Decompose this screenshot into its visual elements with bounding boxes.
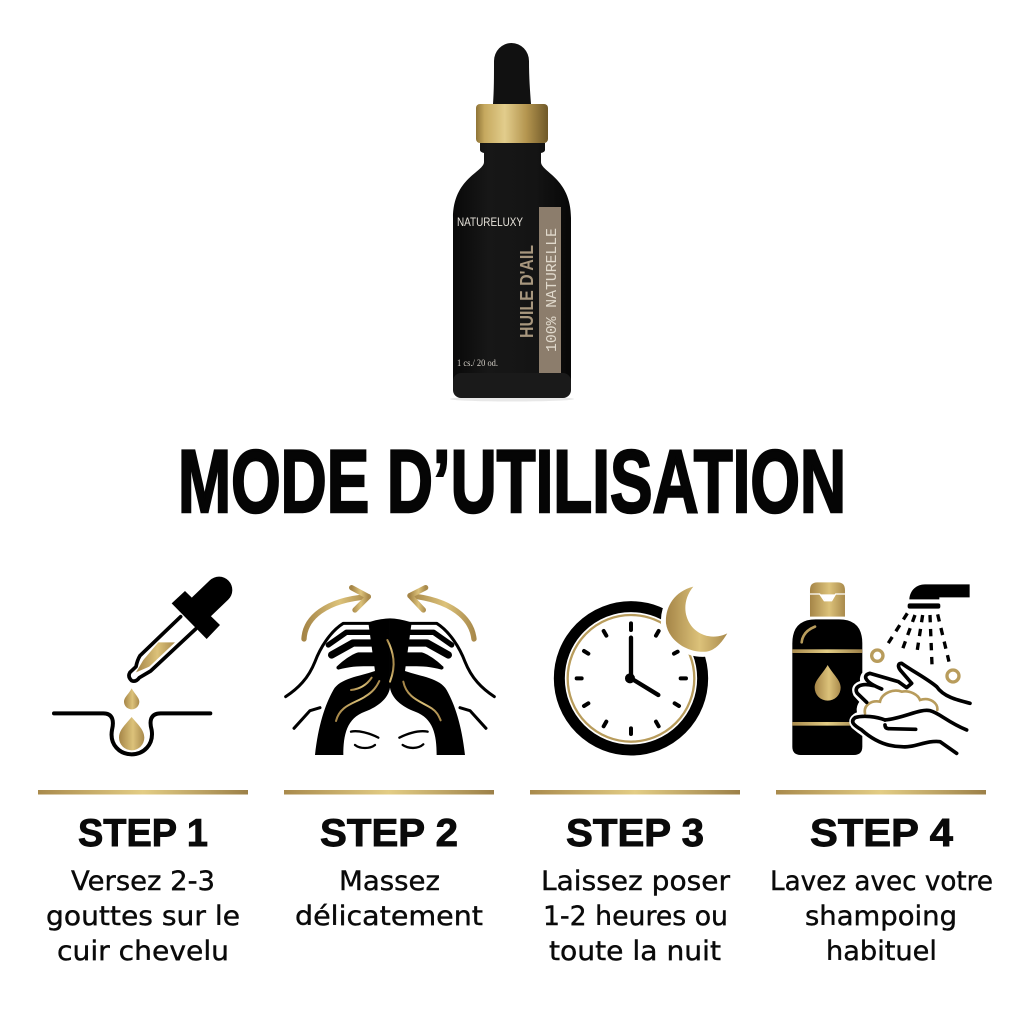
natural claim: 100% NATURELLE [544,228,561,352]
bubbles [872,650,883,661]
water spray [887,613,949,664]
step 1 text: cuir chevelu [57,936,229,967]
step 2 heading: STEP 2 [320,812,458,855]
shower head [909,584,970,599]
step 4 column [770,790,993,967]
oil drop on bottle [815,665,841,701]
step 1 column [38,790,248,967]
washing hands [854,663,970,753]
divider [776,790,986,794]
hair and left hand [286,618,390,755]
foam [865,691,937,722]
step 3 column [530,790,740,967]
divider [284,790,494,794]
icon: scalp massage [286,588,494,755]
dropper bulb [493,43,531,104]
dropper rubber bulb [202,590,219,607]
step 4 text: habituel [826,936,937,967]
divider [38,790,248,794]
bottle body [453,143,571,398]
step 3 text: 1-2 heures ou [543,901,728,932]
step 4 text: shampoing [805,901,957,932]
hour ticks [577,623,686,734]
step 3 text: Laissez poser [541,866,730,897]
step 1 text: Versez 2-3 [71,866,215,897]
step 2 text [295,866,483,932]
volume: 1 cs./ 20 od. [457,359,498,369]
bottle side label [539,207,561,373]
gold hair strands [336,640,441,721]
step 3 heading: STEP 3 [566,812,704,855]
icon: dropper and scalp [54,590,220,754]
crescent moon [666,587,727,652]
step 4 heading: STEP 4 [810,812,953,855]
hair and right hand [390,618,494,755]
absorbed oil drop [119,717,144,750]
oil drop [124,688,139,709]
shampoo body [792,619,862,755]
brand name: NATURELUXY [457,217,523,229]
dropper tube [129,617,196,681]
step 2 column [284,790,494,932]
scalp line [54,713,210,754]
step 2 text: délicatement [295,901,483,932]
closed eyes [351,731,428,748]
gold collar [476,104,548,143]
step 1 text [46,866,240,967]
step 3 text [541,866,730,967]
step 4 text [770,866,993,967]
product name: HUILE D'AIL [517,245,537,338]
icon: shampoo and washing hands [792,582,970,755]
clock hands [631,638,658,695]
step 1 text: gouttes sur le [46,901,240,932]
gold arrows [304,588,474,639]
divider [530,790,740,794]
step 1 heading: STEP 1 [78,812,208,855]
icon: clock and moon [559,587,727,750]
clock rings [559,607,703,750]
step 2 text: Massez [339,866,440,897]
product bottle [450,43,574,402]
step 3 text: toute la nuit [549,936,721,967]
shampoo cap [810,582,845,617]
step 4 text: Lavez avec votre [770,866,993,897]
